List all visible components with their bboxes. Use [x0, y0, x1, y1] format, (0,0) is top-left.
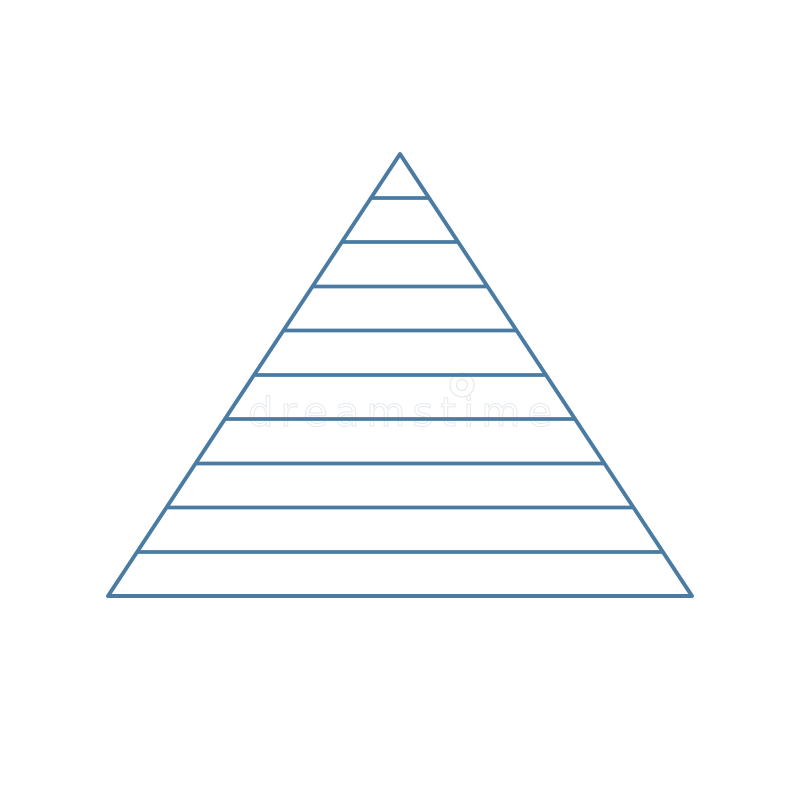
pyramid outline: [108, 154, 692, 596]
watermark: dreamstime: dreamstime: [248, 390, 552, 436]
tier dividers: [138, 198, 662, 552]
pyramid diagram: [108, 154, 692, 596]
